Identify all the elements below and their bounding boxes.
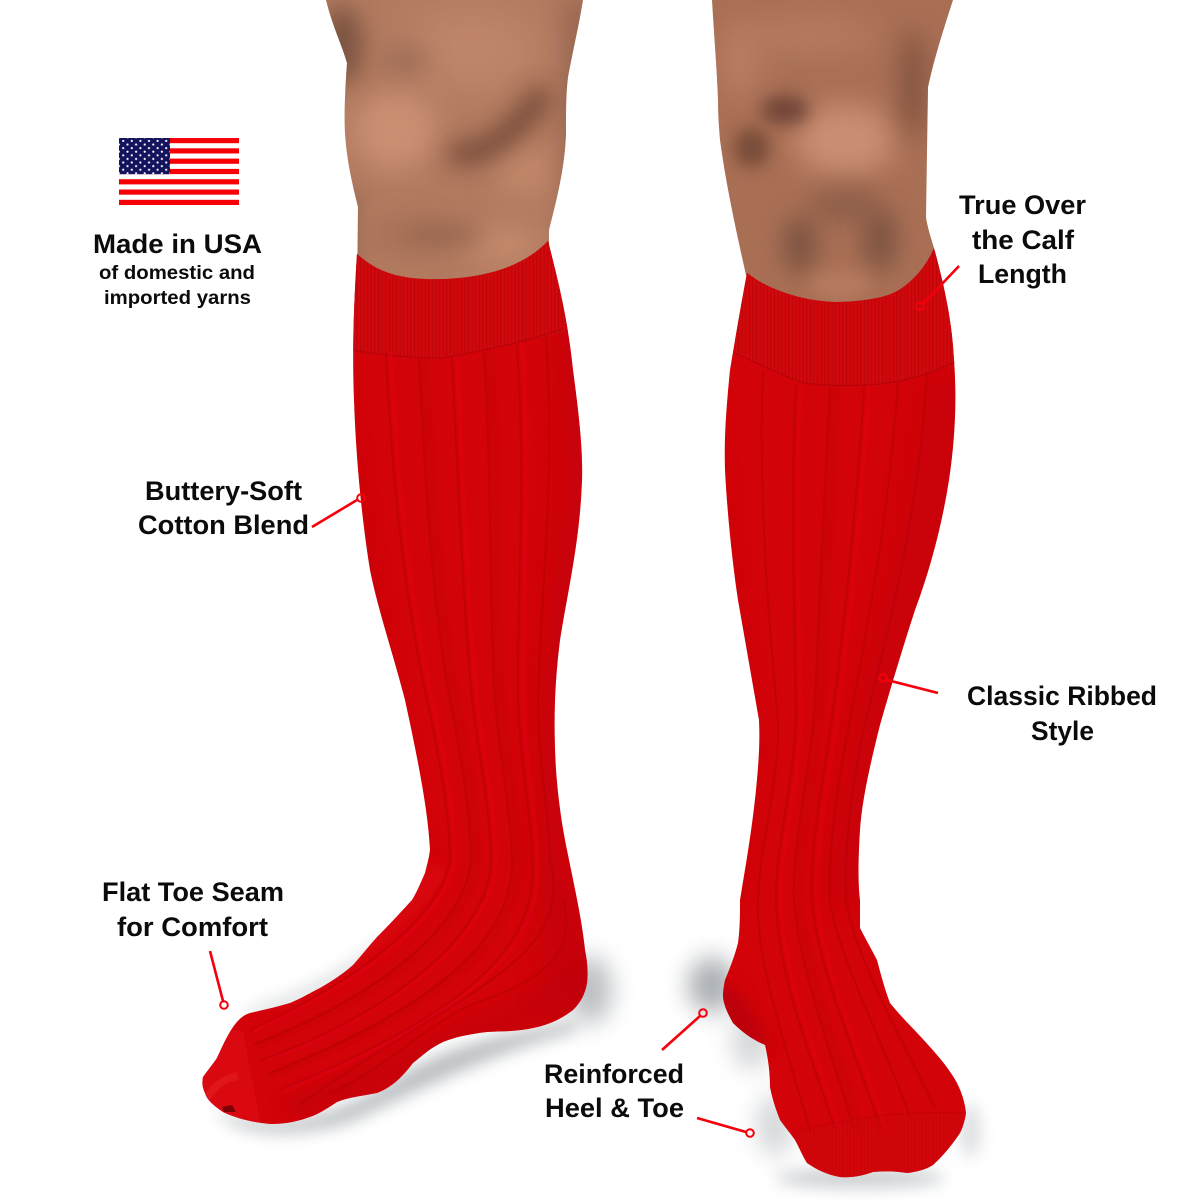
callout: reinforced heel and toe	[544, 1009, 754, 1137]
text: made in usa	[93, 229, 262, 309]
callout: flat toe seam for comfort: Flat Toe Seam	[102, 877, 284, 907]
callout: reinforced heel and toe: Reinforced	[544, 1059, 684, 1089]
callout: flat toe seam for comfort	[102, 877, 284, 1009]
right sock ribs	[758, 372, 935, 1130]
callout: true over the calf length: the Calf	[972, 225, 1075, 255]
callout: classic ribbed style: Style	[1031, 716, 1094, 746]
text: made in usa: Made in USA	[93, 229, 262, 259]
callout: true over the calf length: True Over	[959, 190, 1086, 220]
callout: buttery-soft cotton blend	[138, 476, 365, 540]
right toe	[794, 1112, 966, 1178]
left sock ribs	[250, 336, 566, 1104]
left sock	[202, 241, 588, 1124]
right leg skin	[712, 0, 953, 302]
left leg skin	[326, 0, 583, 280]
left toe	[202, 1030, 260, 1123]
text: made in usa: imported yarns	[104, 287, 251, 309]
callout: true over the calf length: Length	[978, 259, 1067, 289]
callout: classic ribbed style: Classic Ribbed	[967, 681, 1157, 711]
left sock shading	[250, 300, 610, 1120]
callout: buttery-soft cotton blend: Cotton Blend	[138, 510, 309, 540]
icon: american flag	[119, 138, 239, 205]
text: made in usa: of domestic and	[99, 262, 255, 284]
callout: reinforced heel and toe: Heel & Toe	[545, 1093, 684, 1123]
right sock shading	[715, 380, 961, 1050]
right sock cuff	[735, 250, 960, 386]
floor shadows	[215, 940, 980, 1187]
callout: classic ribbed style	[879, 674, 1157, 746]
callout: buttery-soft cotton blend: Buttery-Soft	[145, 476, 302, 506]
left sock cuff	[350, 240, 575, 358]
right sock	[723, 248, 966, 1178]
callout: true over the calf length	[916, 190, 1086, 310]
callout: flat toe seam for comfort: for Comfort	[117, 912, 268, 942]
